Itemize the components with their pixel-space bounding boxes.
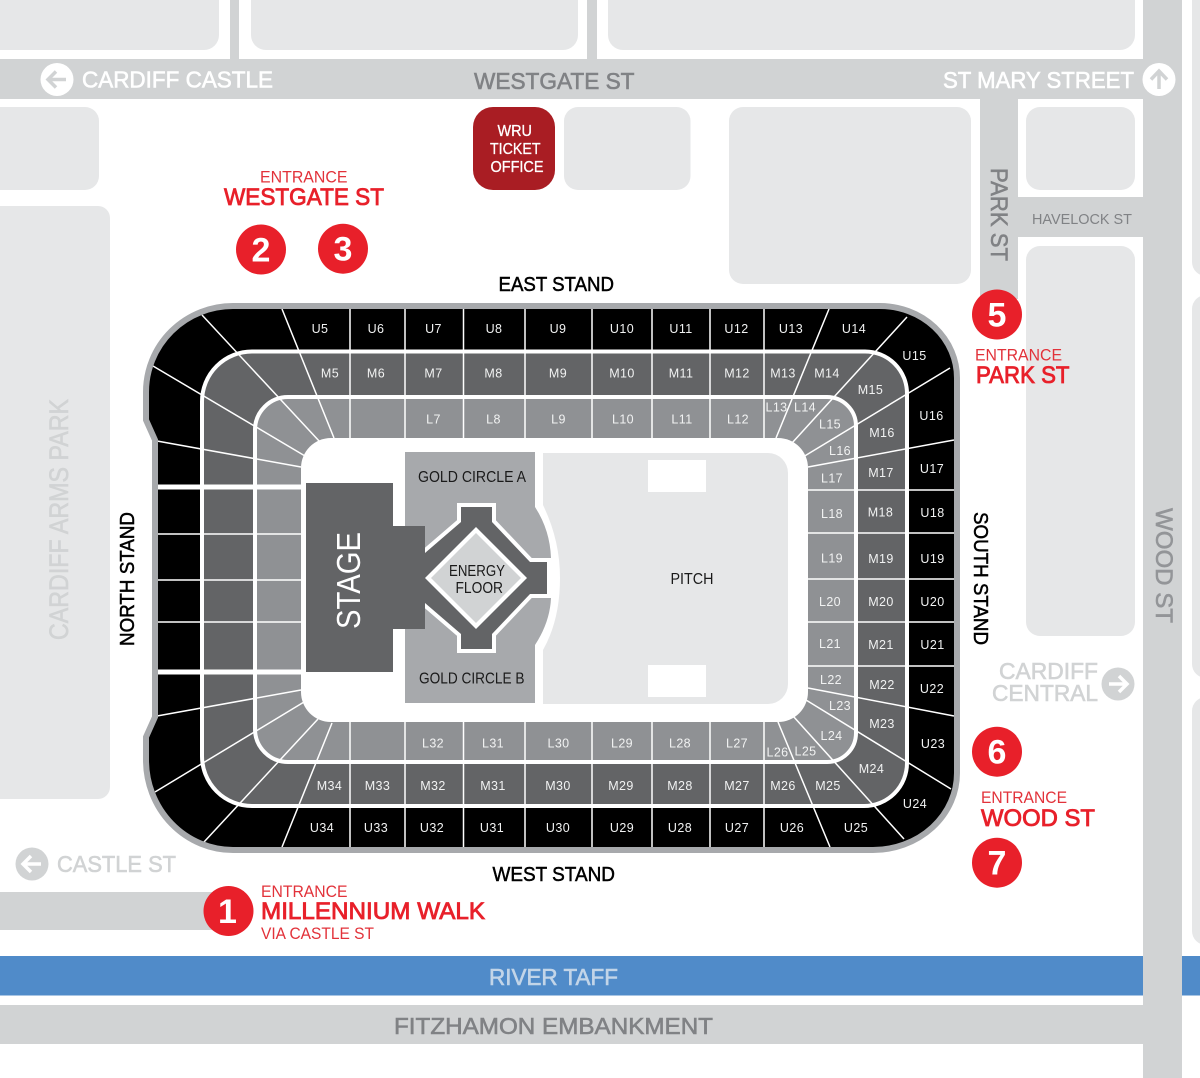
middle tier section labels: M10 [609,366,635,380]
upper tier section labels: U29 [610,821,634,835]
entrance: westgate st: WESTGATE ST [224,184,384,211]
entrance marker 2: 2 [252,232,270,270]
lower tier section labels: L12 [727,412,749,426]
energy floor [425,527,527,629]
wru ticket office: WRU [498,123,532,140]
energy floor: FLOOR [456,580,503,597]
street label: fitzhamon embankment: FITZHAMON EMBANKMENT [394,1013,713,1039]
middle tier [202,352,907,806]
street label: havelock st: HAVELOCK ST [1032,211,1132,228]
middle tier section labels: M11 [669,366,693,380]
street label: westgate st: WESTGATE ST [474,68,634,94]
upper tier section labels: U19 [920,552,945,566]
gold circle area [405,452,551,703]
upper tier section labels: U6 [368,322,384,336]
entrance: wood st: 7 [988,845,1006,883]
upper tier section labels: U20 [920,595,945,609]
road: wood st [1143,0,1182,1078]
street label: st mary street: ST MARY STREET [943,67,1134,93]
middle tier section labels: M6 [367,366,385,380]
entrance: westgate st [224,169,384,274]
entrance: millennium walk: 1 [218,893,237,931]
middle tier section labels: M7 [424,366,443,380]
middle tier section labels: M17 [868,466,894,480]
upper tier section labels: U33 [364,821,388,835]
lower tier section labels: L16 [829,444,851,458]
street label: cardiff castle: CARDIFF CASTLE [82,66,273,92]
upper tier section labels: U30 [546,821,570,835]
stadium seating map [146,306,957,850]
lower tier section labels: L27 [726,736,748,750]
stand label: west: WEST STAND [492,864,615,886]
wru ticket office: TICKET [490,141,541,158]
street label: cardiff central: CENTRAL [992,680,1098,706]
upper tier section labels: U28 [668,821,692,835]
middle tier section labels: M16 [869,426,895,440]
entrance: wood st: WOOD ST [981,805,1095,832]
upper tier section labels: U10 [610,322,634,336]
lower tier section labels: L30 [547,736,570,750]
lower tier section labels: L32 [422,736,444,750]
lower tier section labels: L29 [611,736,633,750]
lower tier section labels: L28 [669,736,691,750]
upper tier section labels: U9 [550,322,566,336]
lower tier section labels: L15 [819,418,841,432]
upper tier section labels [310,322,945,835]
street label: wood st: WOOD ST [1150,508,1177,623]
lower tier section labels: L17 [821,472,843,486]
lower tier section labels: L20 [819,595,841,609]
middle tier section labels: M9 [549,366,567,380]
upper tier section labels: U8 [486,322,502,336]
lower tier section labels: L11 [671,412,693,426]
upper tier section labels: U15 [902,349,927,363]
lower tier section labels: L19 [821,552,843,566]
middle tier section labels: M21 [868,638,894,652]
entrance: park st: 5 [988,296,1006,334]
lower tier section labels: L23 [829,699,851,713]
gold circle b label: GOLD CIRCLE B [419,670,524,688]
lower tier section labels: L18 [821,507,843,521]
upper tier section labels: U7 [425,322,442,336]
entrance: millennium walk [204,883,485,943]
lower tier section labels: L13 [765,400,788,414]
street label: st mary street [943,63,1176,96]
upper tier section labels: U5 [312,322,328,336]
lower tier section labels: L24 [820,729,843,743]
upper tier section labels: U27 [725,821,749,835]
stage [306,483,425,672]
middle tier section labels: M13 [770,366,796,380]
street label: cardiff central: CARDIFF [999,658,1098,684]
stand label: north: NORTH STAND [117,512,139,646]
entrance marker 2 [236,224,286,274]
middle tier section labels [317,366,895,793]
pitch [543,453,788,704]
upper tier section labels: U34 [310,821,334,835]
middle tier section labels: M25 [815,779,841,793]
upper tier section labels: U23 [921,737,945,751]
middle tier section labels: M5 [321,366,339,380]
entrance: park st [972,290,1070,389]
upper tier section labels: U13 [779,322,803,336]
upper tier section labels: U21 [920,638,945,652]
upper tier section labels: U12 [724,322,749,336]
middle tier section labels: M30 [545,779,571,793]
lower tier section labels: L8 [486,412,501,426]
street label: park st: PARK ST [985,168,1012,261]
middle tier section labels: M33 [365,779,390,793]
street label: cardiff central [992,658,1134,706]
lower tier section labels: L26 [766,746,789,760]
river label: RIVER TAFF [489,964,618,990]
entrance: wood st: ENTRANCE [981,789,1067,807]
entrance: wood st: 6 [988,734,1006,772]
arena floor [301,438,808,722]
entrance: wood st [972,727,1095,888]
upper tier section labels: U18 [920,506,945,520]
street label: castle st [16,848,176,880]
lower tier section labels: L25 [794,744,817,758]
lower tier section labels: L22 [820,673,842,687]
outer rim [146,306,957,850]
stage: STAGE [330,532,367,629]
catwalk [425,507,547,649]
middle tier section labels: M24 [859,762,884,776]
street label: cardiff castle [40,63,273,96]
upper tier section labels: U17 [920,462,944,476]
lower tier section labels: L14 [794,400,816,414]
section dividers [153,309,954,847]
upper tier section labels: U25 [844,821,868,835]
middle tier section labels: M23 [869,717,895,731]
wru ticket office: OFFICE [490,159,544,176]
middle tier section labels: M20 [868,595,894,609]
middle tier section labels: M27 [724,779,750,793]
lower tier section labels [422,400,851,760]
wru ticket office [473,107,555,190]
gold circle a label: GOLD CIRCLE A [418,469,526,486]
upper tier section labels: U31 [480,821,504,835]
entrance: park st: PARK ST [976,362,1070,389]
river taff [0,956,1200,996]
pitch: PITCH [670,571,714,588]
entrance: millennium walk: VIA CASTLE ST [261,925,374,943]
middle tier section labels: M14 [814,366,840,380]
entrance marker 3: 3 [334,231,352,269]
upper tier section labels: U24 [903,797,927,811]
upper tier [146,306,957,850]
upper tier section labels: U16 [919,409,944,423]
entrance marker 3 [318,224,368,274]
lower tier section labels: L7 [426,412,441,426]
middle tier section labels: M22 [869,678,895,692]
upper tier section labels: U22 [920,682,944,696]
middle tier section labels: M18 [868,506,893,520]
middle tier section labels: M31 [480,779,506,793]
middle tier section labels: M26 [770,779,796,793]
middle tier section labels: M32 [420,779,446,793]
stand label: south: SOUTH STAND [969,512,991,645]
middle tier section labels: M12 [724,366,750,380]
middle tier section labels: M19 [868,552,894,566]
entrance: millennium walk: MILLENNIUM WALK [261,898,485,925]
upper tier section labels: U14 [842,322,866,336]
middle tier section labels: M28 [667,779,693,793]
upper tier section labels: U26 [780,821,804,835]
upper tier section labels: U11 [669,322,693,336]
middle tier section labels: M15 [858,383,883,397]
park label: cardiff arms park: CARDIFF ARMS PARK [44,399,74,640]
lower tier section labels: L21 [819,637,841,651]
stand label: east: EAST STAND [498,274,614,296]
entrance: westgate st: ENTRANCE [260,169,348,187]
entrance: millennium walk: ENTRANCE [261,883,348,901]
middle tier section labels: M34 [317,779,342,793]
lower tier section labels: L31 [482,736,504,750]
middle tier section labels: M29 [608,779,634,793]
street label: castle st: CASTLE ST [57,851,176,877]
lower tier [255,397,856,762]
middle tier section labels: M8 [484,366,503,380]
upper tier section labels: U32 [420,821,444,835]
lower tier section labels: L10 [612,412,634,426]
entrance: park st: ENTRANCE [975,347,1062,365]
energy floor: ENERGY [449,563,505,580]
lower tier section labels: L9 [551,412,566,426]
